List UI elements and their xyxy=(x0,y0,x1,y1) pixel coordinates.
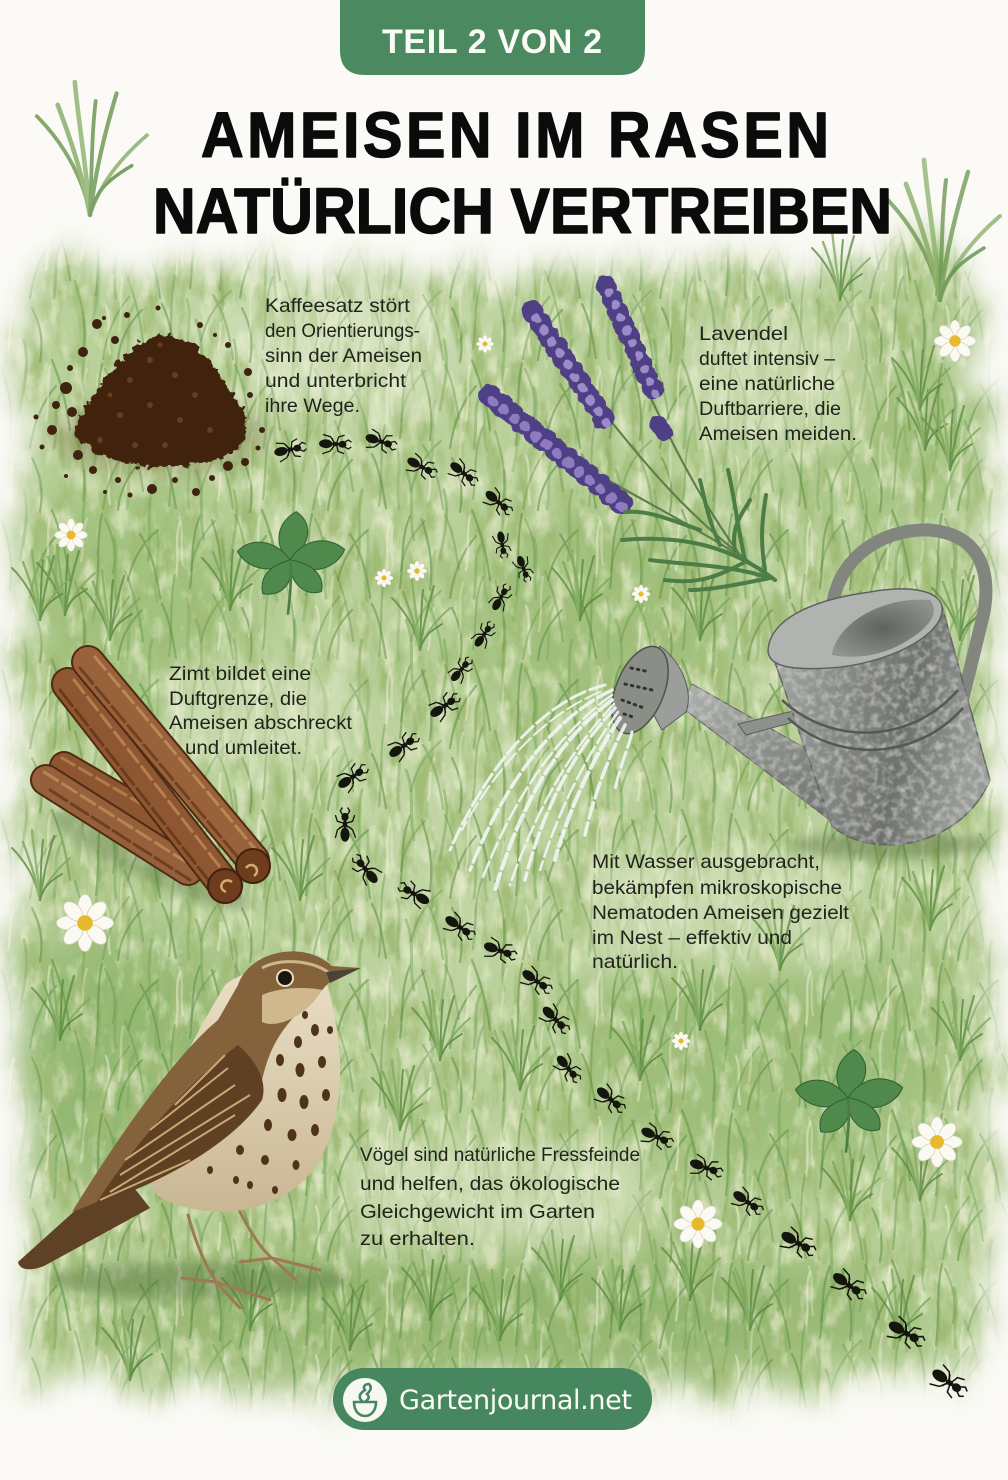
footer brand pill: Gartenjournal.net xyxy=(399,1385,632,1416)
title: AMEISEN IM RASEN xyxy=(201,100,829,172)
text: coffee grounds: ihre Wege. xyxy=(265,395,360,417)
text: nematodes: im Nest – effektiv und xyxy=(592,927,792,949)
text: cinnamon: Ameisen abschreckt xyxy=(169,712,353,734)
text: coffee grounds xyxy=(265,295,422,417)
grass tuft top right xyxy=(884,160,1000,300)
spout brace xyxy=(738,708,808,735)
cinnamon sticks xyxy=(42,657,270,925)
coffee grounds pile xyxy=(34,306,265,498)
banner: part indicator xyxy=(340,0,645,75)
bird xyxy=(18,951,361,1308)
text: lavender: Lavendel xyxy=(699,323,788,345)
can handle xyxy=(832,530,986,702)
bird belly xyxy=(148,967,340,1212)
banner: part indicator: TEIL 2 VON 2 xyxy=(382,23,602,61)
text: cinnamon: Duftgrenze, die xyxy=(169,688,307,710)
text: coffee grounds: Kaffeesatz stört xyxy=(265,295,411,317)
text: birds: und helfen, das ökologische xyxy=(360,1173,620,1195)
text: lavender: duftet intensiv – xyxy=(699,348,835,370)
front stick upper xyxy=(88,662,253,860)
front stick lower xyxy=(68,684,224,884)
watering can xyxy=(601,530,990,859)
bird ground shadow xyxy=(50,1262,350,1298)
text: lavender: eine natürliche xyxy=(699,373,835,395)
bird spots xyxy=(207,1011,333,1194)
title: NATÜRLICH VERTREIBEN xyxy=(153,176,892,248)
title xyxy=(153,100,892,248)
icon: plant in bowl xyxy=(343,1378,387,1422)
flowers: daisies xyxy=(54,320,976,1248)
text: coffee grounds: und unterbricht xyxy=(265,370,407,392)
water spray xyxy=(450,685,632,890)
text: cinnamon: und umleitet. xyxy=(185,737,302,759)
can opening xyxy=(768,589,942,669)
text: coffee grounds: sinn der Ameisen xyxy=(265,345,422,367)
text: nematodes: bekämpfen mikroskopische xyxy=(592,877,842,899)
text: nematodes: Nematoden Ameisen gezielt xyxy=(592,902,850,924)
text: birds xyxy=(360,1144,640,1250)
bird beak xyxy=(326,968,361,983)
text: birds: Gleichgewicht im Garten xyxy=(360,1201,595,1223)
text: nematodes xyxy=(592,851,850,973)
can spout xyxy=(680,684,832,822)
bird eye xyxy=(277,970,293,986)
lavender xyxy=(490,286,775,590)
grass tuft top left xyxy=(37,82,147,215)
text: nematodes: Mit Wasser ausgebracht, xyxy=(592,851,820,873)
can shadow xyxy=(790,831,990,859)
text: birds: zu erhalten. xyxy=(360,1228,475,1250)
text: lavender: Duftbarriere, die xyxy=(699,398,841,420)
bird legs xyxy=(182,1208,320,1308)
text: lavender xyxy=(699,323,857,445)
text: coffee grounds: den Orientierungs- xyxy=(265,320,420,342)
bird tail xyxy=(18,1170,150,1269)
ant trail xyxy=(272,428,971,1404)
back stick upper xyxy=(64,766,178,832)
footer brand pill xyxy=(333,1368,652,1430)
text: cinnamon xyxy=(169,663,353,759)
can rose xyxy=(640,646,688,730)
bird head and wing xyxy=(72,951,360,1212)
text: lavender: Ameisen meiden. xyxy=(699,423,857,445)
clover bottom xyxy=(796,1050,903,1153)
text: cinnamon: Zimt bildet eine xyxy=(169,663,311,685)
bird cheek xyxy=(262,988,322,1024)
back stick lower xyxy=(46,780,188,870)
can body xyxy=(770,606,990,845)
scattered grass tufts xyxy=(12,230,990,1380)
clover top xyxy=(238,512,345,615)
text: birds: Vögel sind natürliche Fressfeinde xyxy=(360,1144,640,1166)
text: nematodes: natürlich. xyxy=(592,951,678,973)
